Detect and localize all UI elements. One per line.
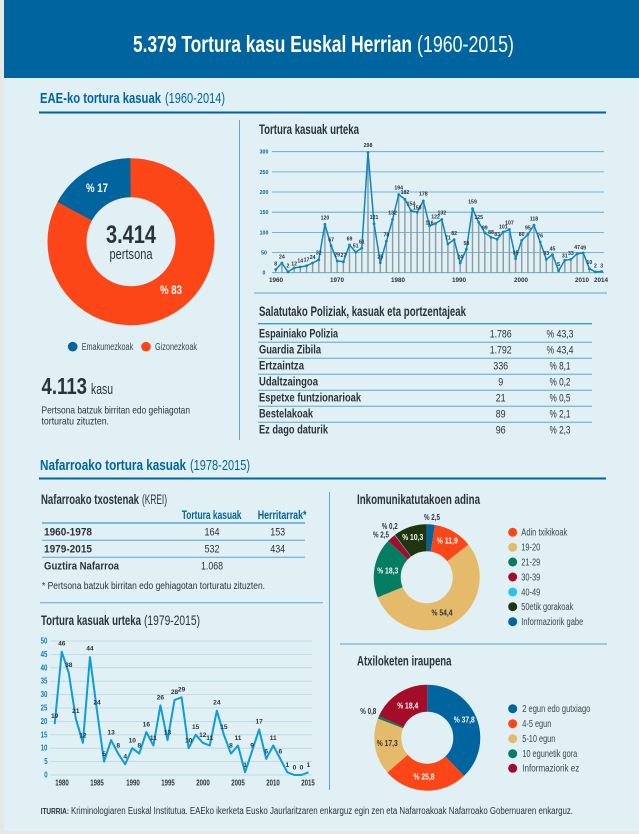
line chart: cases per year 1979-2015: 2000	[196, 779, 210, 788]
line chart: cases per year 1979-2015: 35	[41, 676, 48, 686]
legend: gender: Emakumezkoak	[82, 342, 134, 353]
table rows: % 2,3	[550, 425, 570, 437]
line chart: cases per year 1960-2014: 29	[334, 253, 340, 259]
legend: age: Adin txikikoak	[521, 528, 568, 539]
line chart: cases per year 1960-2014: 31	[562, 253, 568, 259]
panel: detention duration	[357, 653, 591, 782]
line chart: cases per year 1960-2014: 200	[260, 190, 268, 196]
table rows: 1.786	[490, 329, 512, 341]
donut chart: age: % 54,4	[432, 608, 453, 618]
table: 532	[204, 544, 220, 556]
line chart: cases per year 1960-2014: 121	[370, 215, 379, 221]
line chart: cases per year 1979-2015: 30	[41, 689, 48, 699]
line chart: cases per year 1979-2015	[41, 636, 315, 788]
line chart: cases per year 1960-2014: 78	[384, 232, 389, 238]
table rows: Ez dago daturik	[259, 425, 328, 437]
heading: Atxiloketen iraupena	[357, 653, 452, 669]
legend: age: 21-29	[521, 557, 541, 568]
line chart: cases per year 1979-2015: 10	[185, 737, 193, 744]
line chart: cases per year 1960-2014: 24	[310, 255, 316, 261]
line chart: cases per year 1960-2014: 182	[401, 190, 409, 196]
line chart: cases per year 1960-2014: 25	[377, 254, 383, 260]
line chart: cases per year 1960-2014: 118	[530, 216, 538, 222]
header banner	[4, 0, 639, 78]
line chart: cases per year 1979-2015: 40	[41, 662, 48, 672]
line chart: cases per year 1960-2014	[260, 143, 608, 284]
line chart: cases per year 1960-2014: 1970	[330, 277, 344, 284]
line chart: cases per year 1960-2014: 99	[482, 225, 488, 231]
line chart: cases per year 1979-2015: 15	[220, 724, 228, 731]
line chart: cases per year 1979-2015: 38	[65, 662, 73, 669]
line chart: cases per year 1960-2014: 32	[316, 251, 322, 257]
callout: 4.113 cases: kasu	[91, 381, 113, 398]
line chart: cases per year 1960-2014: 150	[413, 206, 422, 212]
table rows	[259, 329, 574, 437]
line chart: cases per year 1979-2015: 21	[72, 708, 80, 715]
line chart: cases per year 1979-2015: 10	[41, 743, 48, 753]
donut chart: age: % 11,9	[437, 536, 458, 546]
section heading: Nafarroa: Nafarroako tortura kasuak	[40, 457, 187, 474]
line chart: cases per year 1979-2015: 25	[41, 702, 48, 712]
line chart: cases per year 1979-2015: 19	[51, 713, 59, 720]
line chart: cases per year 1979-2015: 1990	[126, 779, 140, 788]
line chart: cases per year 1960-2014: 1960	[269, 277, 283, 284]
legend: age: 19-20	[521, 543, 541, 554]
line chart: cases per year 1979-2015: 13	[164, 729, 171, 736]
donut chart: duration: % 17,3	[377, 739, 398, 748]
line chart: cases per year 1960-2014: 2	[287, 264, 290, 270]
legend: duration: 10 egunetik gora	[522, 749, 578, 760]
line chart: cases per year 1979-2015: 46	[58, 640, 66, 647]
legend: duration: 5-10 egun	[522, 734, 555, 745]
panel: age of detainees	[340, 491, 607, 644]
table rows: Bestelakoak	[259, 409, 313, 421]
table: 1979-2015	[44, 544, 92, 556]
line chart: cases per year 1979-2015: 24	[93, 700, 101, 707]
line chart: cases per year 1960-2014: 61	[359, 240, 365, 246]
line chart: cases per year 1960-2014: 250	[260, 170, 268, 176]
legend: age	[508, 528, 584, 628]
table rows: 336	[493, 361, 508, 373]
line chart: cases per year 1979-2015: 12	[79, 732, 87, 739]
line chart: cases per year 1979-2015: 6	[264, 748, 268, 755]
line chart: cases per year 1979-2015: 11	[206, 735, 214, 742]
table: Tortura kasuak	[182, 510, 242, 522]
line chart: cases per year 1960-2014: 14	[297, 259, 303, 265]
line chart: cases per year 1960-2014: 0	[263, 271, 266, 277]
line chart: cases per year 1960-2014: 178	[419, 192, 428, 198]
title: 5.379 Tortura kasu Euskal Herrian	[133, 31, 412, 57]
line chart: cases per year 1960-2014: 95	[525, 226, 531, 232]
heading: (1979-2015)	[144, 612, 200, 628]
line chart: cases per year 1979-2015: 2010	[266, 779, 280, 788]
line chart: cases per year 1979-2015: 5	[102, 751, 106, 758]
table rows: 96	[496, 425, 506, 437]
line chart: cases per year 1979-2015: 2005	[231, 779, 245, 788]
heading: (KREI)	[142, 491, 167, 507]
line chart: cases per year 1979-2015: 15	[41, 729, 48, 739]
line chart: cases per year 1979-2015: 11	[150, 735, 157, 742]
callout: 4.113 cases: 4.113	[42, 373, 87, 399]
line chart: cases per year 1979-2015: 17	[255, 719, 263, 726]
donut chart: age: % 18,3	[377, 566, 399, 576]
line chart: cases per year 1960-2014: 101	[499, 225, 508, 231]
section heading: EAE: EAE-ko tortura kasuak	[40, 90, 161, 107]
line chart: cases per year 1960-2014: 67	[328, 237, 334, 243]
donut chart: duration: % 25,8	[414, 772, 435, 782]
line chart: cases per year 1960-2014: 17	[304, 257, 309, 263]
line chart: cases per year 1979-2015: 1980	[55, 779, 69, 788]
table	[42, 510, 307, 573]
line chart: cases per year 1960-2014: 82	[451, 231, 457, 237]
donut chart: age	[373, 513, 466, 618]
donut chart: duration: % 18,4	[397, 702, 419, 710]
section heading: EAE: (1960-2014)	[165, 90, 225, 107]
line chart: cases per year 1979-2015: 8	[137, 743, 141, 750]
donut chart: gender	[67, 178, 195, 306]
line chart: cases per year 1960-2014: 10	[587, 260, 592, 266]
legend: age: 40-49	[521, 587, 541, 598]
line chart: cases per year 1960-2014: 125	[474, 215, 483, 221]
table: Guztira Nafarroa	[44, 561, 120, 573]
legend: age: 50etik gorakoak	[521, 602, 574, 613]
legend: age: 30-39	[521, 572, 541, 583]
line chart: cases per year 1979-2015: 44	[86, 646, 94, 653]
line chart: cases per year 1979-2015: 4	[123, 754, 127, 761]
line chart: cases per year 1960-2014: 107	[505, 220, 514, 226]
table: 434	[270, 544, 285, 556]
legend: duration: Informaziorik ez	[522, 764, 579, 775]
line chart: cases per year 1979-2015: 2015	[301, 779, 315, 788]
section heading: Nafarroa	[39, 457, 606, 478]
line chart: cases per year 1960-2014: 3	[600, 263, 603, 269]
line chart: cases per year 1960-2014: 83	[494, 232, 500, 238]
line chart: cases per year 1960-2014: 154	[407, 201, 415, 207]
line chart: cases per year 1979-2015: 0	[300, 764, 304, 771]
line chart: cases per year 1960-2014: 194	[394, 185, 403, 191]
line chart: cases per year 1960-2014: 50	[261, 250, 267, 256]
panel: KREI table	[40, 491, 323, 603]
line chart: cases per year 1979-2015: 8	[116, 743, 120, 750]
line chart: cases per year 1960-2014: 58	[464, 241, 469, 247]
line chart: cases per year 1960-2014: 122	[431, 215, 440, 221]
line chart: cases per year 1960-2014: 116	[425, 221, 434, 227]
line chart: cases per year 1979-2015: 12	[199, 732, 207, 739]
footnote: * Pertsona batzuk birritan edo gehiagotan torturatu zituzten.	[42, 581, 265, 592]
line chart: cases per year 1979-2015: 1985	[90, 779, 104, 788]
line chart: cases per year 1960-2014: 45	[550, 246, 555, 252]
table: 164	[204, 527, 220, 539]
line chart: cases per year 1960-2014: 71	[445, 235, 451, 241]
callout: 4.113 cases: Pertsona batzuk birritan edo gehiagotan	[42, 404, 190, 416]
line chart: cases per year 1979-2015: 50	[41, 636, 48, 646]
line chart: cases per year 1979-2015: 20	[41, 716, 48, 726]
line chart: cases per year 1979-2015: 45	[41, 649, 48, 659]
line chart: cases per year 1960-2014: 2010	[575, 277, 589, 284]
line chart: cases per year 1960-2014: 2	[594, 263, 597, 269]
line chart: cases per year 1979-2015: 29	[178, 686, 186, 693]
line chart: cases per year 1960-2014: 24	[279, 254, 285, 260]
source footer: ITURRIA:	[41, 807, 69, 816]
table rows: % 0,2	[550, 377, 570, 389]
line chart: cases per year 1960-2014: 100	[260, 230, 268, 236]
table rows: Ertzaintza	[259, 361, 304, 373]
table rows: Espainiako Polizia	[259, 329, 338, 341]
table: 1.068	[201, 561, 223, 573]
panel: yearly cases Navarre	[41, 612, 315, 788]
line chart: cases per year 1979-2015: 1	[286, 762, 290, 769]
panel: police table	[258, 303, 592, 437]
line chart: cases per year 1960-2014: 88	[488, 230, 494, 236]
table rows: % 2,1	[550, 409, 570, 421]
line chart: cases per year 1979-2015: 11	[235, 735, 242, 742]
line chart: cases per year 1960-2014: 150	[260, 210, 268, 216]
line chart: cases per year 1960-2014: 27	[341, 253, 346, 259]
table rows: 9	[498, 377, 503, 389]
table rows: Guardia Zibila	[259, 345, 321, 357]
line chart: cases per year 1960-2014: 132	[388, 210, 397, 216]
line chart: cases per year 1979-2015: 1	[307, 762, 311, 769]
line chart: cases per year 1979-2015: 9	[250, 743, 254, 750]
line chart: cases per year 1960-2014: 298	[364, 143, 372, 149]
legend: age: Informaziorik gabe	[521, 617, 584, 628]
line chart: cases per year 1960-2014: 33	[568, 251, 574, 257]
table rows: Udaltzaingoa	[259, 377, 318, 389]
line chart: cases per year 1960-2014: 47	[574, 245, 580, 251]
line chart: cases per year 1979-2015: 6	[278, 748, 282, 755]
donut chart: duration	[360, 698, 475, 782]
legend: gender	[68, 342, 198, 353]
table: 1960-1978	[44, 527, 92, 539]
line chart: cases per year 1979-2015: 13	[107, 729, 115, 736]
table rows: % 0,5	[550, 393, 570, 405]
donut chart: age: % 10,3	[402, 533, 424, 542]
table rows: 21	[496, 393, 506, 405]
line chart: cases per year 1960-2014: 76	[537, 233, 543, 239]
heading: Tortura kasuak urteka	[41, 612, 141, 628]
donut chart: gender: % 83	[160, 285, 182, 297]
line chart: cases per year 1979-2015: 0	[293, 764, 297, 771]
line chart: cases per year 1960-2014: 69	[347, 236, 352, 242]
donut chart: age: % 0,2	[382, 522, 398, 531]
line chart: cases per year 1979-2015: 26	[157, 694, 164, 701]
heading: Inkomunikatutakoen adina	[357, 491, 480, 507]
line chart: cases per year 1960-2014: 300	[260, 150, 268, 156]
line chart: cases per year 1979-2015: 28	[171, 689, 179, 696]
line chart: cases per year 1960-2014: 120	[321, 215, 329, 221]
line chart: cases per year 1979-2015: 11	[270, 735, 277, 742]
line chart: cases per year 1960-2014: 2014	[594, 277, 608, 284]
table rows: % 43,4	[546, 345, 574, 357]
section heading: Nafarroa: (1978-2015)	[190, 457, 250, 474]
line chart: cases per year 1960-2014: 80	[519, 232, 525, 238]
heading: Tortura kasuak urteka	[259, 121, 359, 137]
line chart: cases per year 1979-2015: 15	[192, 724, 200, 731]
table rows: % 8,1	[550, 361, 570, 373]
line chart: cases per year 1960-2014: 35	[513, 250, 519, 256]
heading: Salatutako Poliziak, kasuak eta portzentajeak	[259, 303, 466, 319]
section heading: EAE	[39, 90, 606, 112]
table rows: 89	[496, 409, 506, 421]
heading: Nafarroako txostenak	[41, 491, 139, 507]
line chart: cases per year 1979-2015: 16	[143, 721, 150, 728]
line chart: cases per year 1979-2015: 24	[213, 700, 221, 707]
legend: duration: 2 egun edo gutxiago	[522, 704, 591, 715]
legend: gender: Gizonezkoak	[155, 342, 198, 353]
line chart: cases per year 1960-2014: 2000	[514, 277, 528, 284]
donut chart: gender: pertsona	[110, 246, 153, 263]
table rows: % 43,3	[546, 329, 574, 341]
panel: EAE persons donut	[42, 178, 198, 428]
title: (1960-2015)	[417, 31, 514, 57]
table rows: 1.792	[490, 345, 512, 357]
donut chart: age: % 2,5	[424, 513, 440, 522]
legend: duration: 4-5 egun	[522, 719, 551, 730]
line chart: cases per year 1979-2015: 5	[44, 756, 48, 766]
panel: yearly cases EAE	[254, 121, 608, 293]
line chart: cases per year 1960-2014: 159	[468, 199, 477, 205]
donut chart: duration: % 0,8	[360, 707, 377, 716]
line chart: cases per year 1960-2014: 49	[580, 245, 586, 251]
line chart: cases per year 1960-2014: 24	[457, 255, 463, 261]
line chart: cases per year 1979-2015: 1	[243, 762, 247, 769]
table: Herritarrak*	[258, 510, 307, 522]
table: 153	[270, 527, 285, 539]
line chart: cases per year 1960-2014: 1980	[391, 277, 405, 284]
line chart: cases per year 1960-2014: 12	[291, 262, 297, 268]
donut chart: gender: 3.414	[106, 221, 156, 249]
legend: duration	[508, 704, 591, 775]
line chart: cases per year 1979-2015: 8	[229, 743, 233, 750]
line chart: cases per year 1960-2014: 51	[353, 244, 359, 250]
callout: 4.113 cases	[42, 373, 190, 428]
line chart: cases per year 1979-2015: 0	[44, 770, 48, 780]
table rows: Espetxe funtzionarioak	[259, 393, 361, 405]
donut chart: gender: % 17	[86, 183, 108, 195]
line chart: cases per year 1979-2015: 10	[129, 737, 136, 744]
donut chart: duration: % 37,8	[454, 716, 475, 724]
donut chart: age: % 2,5	[373, 530, 389, 540]
line chart: cases per year 1960-2014: 33	[543, 251, 549, 257]
line chart: cases per year 1960-2014: 8	[274, 261, 277, 267]
line chart: cases per year 1960-2014: 1990	[452, 277, 466, 284]
line chart: cases per year 1960-2014: 132	[437, 211, 446, 217]
line chart: cases per year 1979-2015: 1995	[161, 779, 175, 788]
line chart: cases per year 1960-2014: 5	[557, 262, 560, 268]
callout: 4.113 cases: torturatu zituzten.	[42, 416, 109, 428]
